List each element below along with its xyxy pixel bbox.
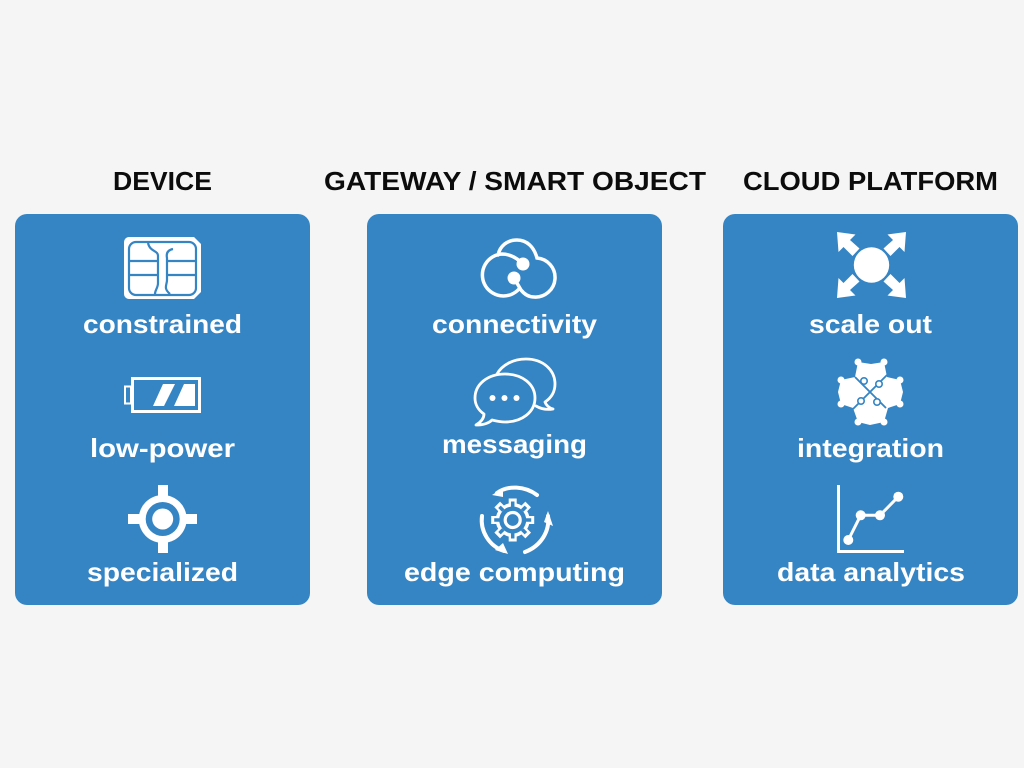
heading: gateway / smart object: GATEWAY / SMART OBJECT bbox=[324, 166, 706, 196]
heading: device: DEVICE bbox=[113, 166, 212, 196]
label: specialized: specialized bbox=[87, 557, 238, 587]
icon: target bbox=[128, 485, 197, 553]
heading: cloud platform: CLOUD PLATFORM bbox=[743, 166, 998, 196]
label: scale out: scale out bbox=[809, 309, 932, 339]
label: integration: integration bbox=[797, 433, 944, 463]
label: edge computing: edge computing bbox=[404, 557, 625, 587]
label: connectivity: connectivity bbox=[432, 309, 598, 339]
icon: scale out arrows bbox=[837, 232, 906, 298]
icon: line chart bbox=[838, 485, 904, 552]
icon: chat bubbles bbox=[475, 359, 555, 425]
label: low-power: low-power bbox=[90, 433, 235, 463]
panel: device bbox=[15, 214, 310, 605]
label: data analytics: data analytics bbox=[777, 557, 965, 587]
icon: battery bbox=[125, 378, 200, 412]
panel: cloud platform bbox=[723, 214, 1018, 605]
label: messaging: messaging bbox=[442, 429, 587, 459]
icon: puzzle pieces bbox=[838, 358, 904, 426]
panel: gateway / smart object bbox=[367, 214, 662, 605]
icon: gear with cycle arrows bbox=[482, 488, 553, 554]
icon: cloud connectivity bbox=[482, 240, 555, 297]
icon: SIM chip bbox=[124, 237, 201, 299]
label: constrained: constrained bbox=[83, 309, 242, 339]
